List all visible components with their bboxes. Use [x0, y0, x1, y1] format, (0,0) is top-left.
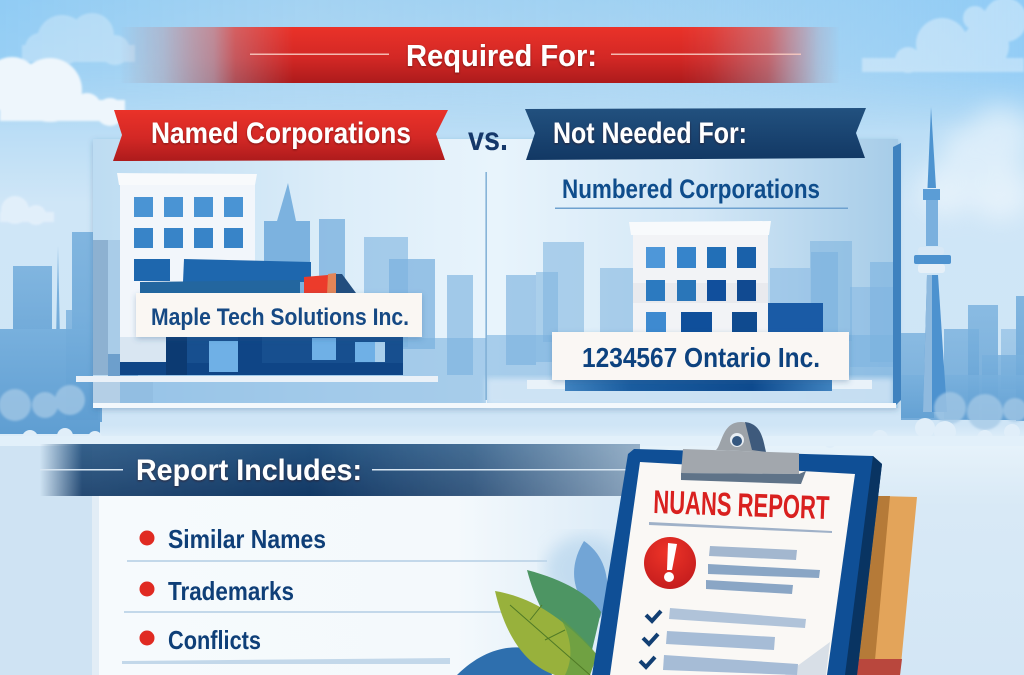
right city skyline [487, 241, 894, 403]
name plate: 1234567 Ontario [552, 332, 849, 380]
list item: Conflicts [140, 625, 261, 655]
clouds [0, 0, 1024, 225]
panel: company comparison [93, 139, 901, 408]
heading banner: Report Includes [40, 444, 640, 496]
icon: leaves [457, 536, 625, 675]
left building ledge [76, 376, 438, 382]
ribbon: Not Needed For [525, 108, 866, 160]
left city skyline [120, 183, 486, 403]
list item: Similar Names: Similar Names [168, 524, 326, 554]
ribbon: Named Corporations: Named Corporations [151, 117, 411, 150]
icon: alert [644, 537, 696, 589]
icon: clipboard with NUANS report [592, 422, 882, 675]
subheading: Numbered Corporations: Numbered Corporations [562, 174, 820, 204]
right building ledge [527, 380, 872, 389]
clipboard paper [610, 462, 855, 675]
report title: NUANS REPORT [653, 483, 830, 526]
heading banner: Required For: Required For: [406, 38, 597, 73]
icon: orange folder behind clipboard [855, 496, 917, 675]
name plate: Maple Tech: Maple Tech Solutions Inc. [151, 304, 409, 331]
list item: Trademarks: Trademarks [168, 576, 294, 606]
left building [76, 173, 438, 382]
panel: report includes list [92, 495, 652, 675]
name plate: 1234567 Ontario: 1234567 Ontario Inc. [582, 342, 820, 373]
background sky [0, 0, 1024, 538]
right building [527, 221, 872, 391]
ribbon: Named Corporations [113, 110, 448, 161]
ribbon: Not Needed For: Not Needed For: [553, 117, 747, 150]
alert text lines [706, 546, 820, 594]
ground mist [0, 385, 1024, 448]
skyline showing through panel left [93, 240, 153, 403]
clipboard clip [681, 422, 806, 484]
panel divider [486, 172, 487, 400]
list item: Conflicts: Conflicts [168, 625, 261, 655]
vs label: vs. [468, 120, 508, 157]
left skyline outside panel [0, 232, 102, 434]
heading banner: Required For [120, 27, 840, 83]
checklist rows [640, 608, 806, 675]
icon: CN Tower [914, 107, 951, 412]
panel mist bottom [486, 378, 893, 406]
name plate: Maple Tech [136, 293, 422, 337]
clipboard board [592, 449, 882, 675]
panel right edge bar [893, 143, 901, 408]
heading banner: Report Includes: Report Includes: [136, 454, 362, 487]
right skyline outside panel [901, 296, 1024, 421]
